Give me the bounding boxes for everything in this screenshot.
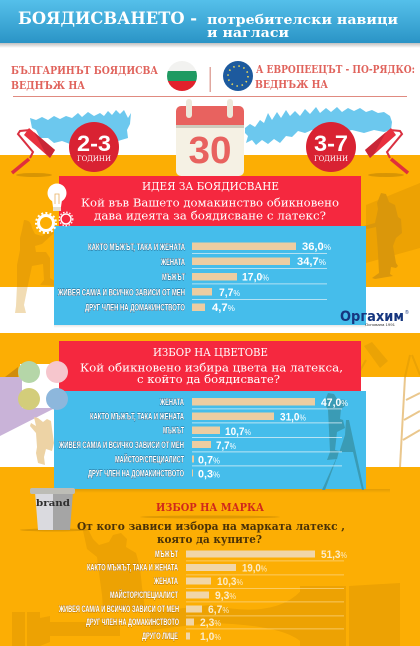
bar chart: colours xyxy=(54,391,390,493)
bar chart: idea: 4,7% xyxy=(212,302,235,314)
bar chart: colours: 10,7% xyxy=(225,426,251,438)
panel heading: дава идеята за боядисване с латекс? xyxy=(94,208,326,222)
panel heading: с който да боядисвате? xyxy=(137,372,280,386)
silhouettes: painter and brushes xyxy=(12,525,400,646)
logo: Orgachim: Основана 1991 xyxy=(365,323,395,327)
panel heading: Кой във Вашето домакинство обикновено xyxy=(81,196,339,210)
bar chart: colours: МАЙСТОР/СПЕЦИАЛИСТ xyxy=(115,454,184,466)
bar chart: brand: 9,3% xyxy=(215,590,236,602)
bar chart: brand: ЖИВЕЯ САМ/А И ВСИЧКО ЗАВИСИ ОТ МЕН xyxy=(58,604,179,615)
icon: light bulb and gears xyxy=(36,184,73,233)
panel heading xyxy=(59,176,361,227)
bar chart: brand: ДРУГ ЧЛЕН НА ДОМАКИНСТВОТО xyxy=(86,617,179,628)
icon: calendar with 30: 30 xyxy=(188,130,232,172)
bar chart: idea: ДРУГ ЧЛЕН НА ДОМАКИНСТВОТО xyxy=(85,302,185,314)
header bar xyxy=(0,0,420,48)
bar chart: idea: ЖЕНАТА xyxy=(160,257,185,268)
title: БОЯДИСВАНЕТО - xyxy=(18,9,197,29)
icon: brand paint bucket xyxy=(20,488,88,532)
bar chart: colours: 47,0% xyxy=(321,397,348,409)
bar chart: brand: 19,0% xyxy=(242,562,267,574)
icon: left paint roller xyxy=(12,128,55,177)
bar chart: idea: 34,7% xyxy=(297,256,326,268)
bar chart: colours: 7,7% xyxy=(216,440,236,452)
icon: colour palette circles xyxy=(18,361,68,410)
bar chart: brand: 51,3% xyxy=(321,549,347,561)
icon: eu flag xyxy=(223,61,253,91)
icon: brand paint bucket: brand xyxy=(36,498,70,509)
panel heading: ИДЕЯ ЗА БОЯДИСВАНЕ xyxy=(142,179,279,193)
bar chart: brand xyxy=(58,549,347,643)
icon: right paint roller xyxy=(365,128,408,177)
logo: Orgachim: ® xyxy=(405,309,409,316)
bar chart: colours: 0,7% xyxy=(198,454,220,466)
badge: 3-7 years xyxy=(306,122,356,172)
european frequency text xyxy=(255,62,415,91)
icon: calendar with 30 xyxy=(176,99,244,176)
bar chart: colours: КАКТО МЪЖЪТ, ТАКА И ЖЕНАТА xyxy=(90,412,184,422)
bar chart: colours: ЖЕНАТА xyxy=(159,397,184,408)
badge: 2-3 years: ГОДИНИ xyxy=(77,155,111,163)
bulgarian frequency text: БЪЛГАРИНЪТ БОЯДИСВА xyxy=(11,63,159,77)
silhouette: man on the right xyxy=(364,183,420,279)
subtitle: потребителски навици xyxy=(207,13,398,28)
bar chart: brand: КАКТО МЪЖЪТ, ТАКА И ЖЕНАТА xyxy=(87,562,178,574)
panel heading: ИЗБОР НА МАРКА xyxy=(156,500,265,514)
bar chart: brand: 1,0% xyxy=(200,631,221,643)
bar chart: brand: ЖЕНАТА xyxy=(153,576,178,587)
bulgarian frequency text xyxy=(11,63,159,92)
bulgarian frequency text: ВЕДНЪЖ НА xyxy=(11,78,86,92)
bar chart: colours: МЪЖЪТ xyxy=(163,426,184,436)
bar chart: colours: 0,3% xyxy=(198,468,220,480)
painter silhouette xyxy=(30,417,54,465)
panel heading: ИЗБОР НА ЦВЕТОВЕ xyxy=(153,345,268,359)
panel heading xyxy=(59,341,361,392)
badge: 2-3 years xyxy=(69,122,119,172)
badge: 2-3 years: 2-3 xyxy=(77,131,111,156)
panel heading: От кого зависи избора на марката латекс , xyxy=(77,519,345,533)
panel heading: която да купите? xyxy=(157,532,262,546)
panel: brand xyxy=(58,500,347,643)
subtitle xyxy=(207,13,398,41)
bar chart: brand: 10,3% xyxy=(217,576,243,588)
paint splash left xyxy=(30,110,131,144)
bar chart: idea: ЖИВЕЯ САМ/А И ВСИЧКО ЗАВИСИ ОТ МЕН xyxy=(57,288,185,298)
bar chart: colours: ЖИВЕЯ САМ/А И ВСИЧКО ЗАВИСИ ОТ МЕН xyxy=(58,440,184,451)
bar chart: idea: 36,0% xyxy=(302,241,331,253)
bar chart: brand: ДРУГО ЛИЦЕ xyxy=(142,631,178,642)
silhouette: woman climbing xyxy=(15,220,58,313)
paint splash right xyxy=(245,107,392,145)
bar chart: idea: 17,0% xyxy=(242,272,269,284)
logo: Orgachim: Оргахим xyxy=(340,309,404,325)
bar chart: brand: 6,7% xyxy=(208,604,229,616)
panel heading xyxy=(77,500,345,546)
bar chart: brand: 2,3% xyxy=(200,617,221,629)
subtitle: и нагласи xyxy=(207,26,289,41)
bar chart: idea: МЪЖЪТ xyxy=(162,272,185,283)
bar chart: idea: 7,7% xyxy=(219,287,240,299)
bar chart: brand: МАЙСТОР/СПЕЦИАЛИСТ xyxy=(110,589,178,601)
panel heading: Кой обикновено избира цвета на латекса, xyxy=(80,360,343,374)
european frequency text: ВЕДНЪЖ НА xyxy=(255,77,329,91)
panel: colours xyxy=(54,341,390,493)
badge: 3-7 years: 3-7 xyxy=(314,131,348,156)
decoration: roller and ladder silhouettes xyxy=(352,342,420,467)
bar chart: colours: 31,0% xyxy=(280,412,306,424)
icon: bulgarian flag xyxy=(167,61,197,91)
decoration: colour palette backing and painter xyxy=(0,364,64,465)
bar chart: idea: КАКТО МЪЖЪТ, ТАКА И ЖЕНАТА xyxy=(88,242,185,253)
bar chart: brand: МЪЖЪТ xyxy=(155,549,178,560)
badge: 3-7 years: ГОДИНИ xyxy=(314,155,348,163)
panel: idea xyxy=(54,176,409,328)
silhouette: painter on ladder xyxy=(322,393,364,490)
bar chart: colours: ДРУГ ЧЛЕН НА ДОМАКИНСТВОТО xyxy=(88,468,184,480)
bar chart: idea xyxy=(54,226,366,328)
